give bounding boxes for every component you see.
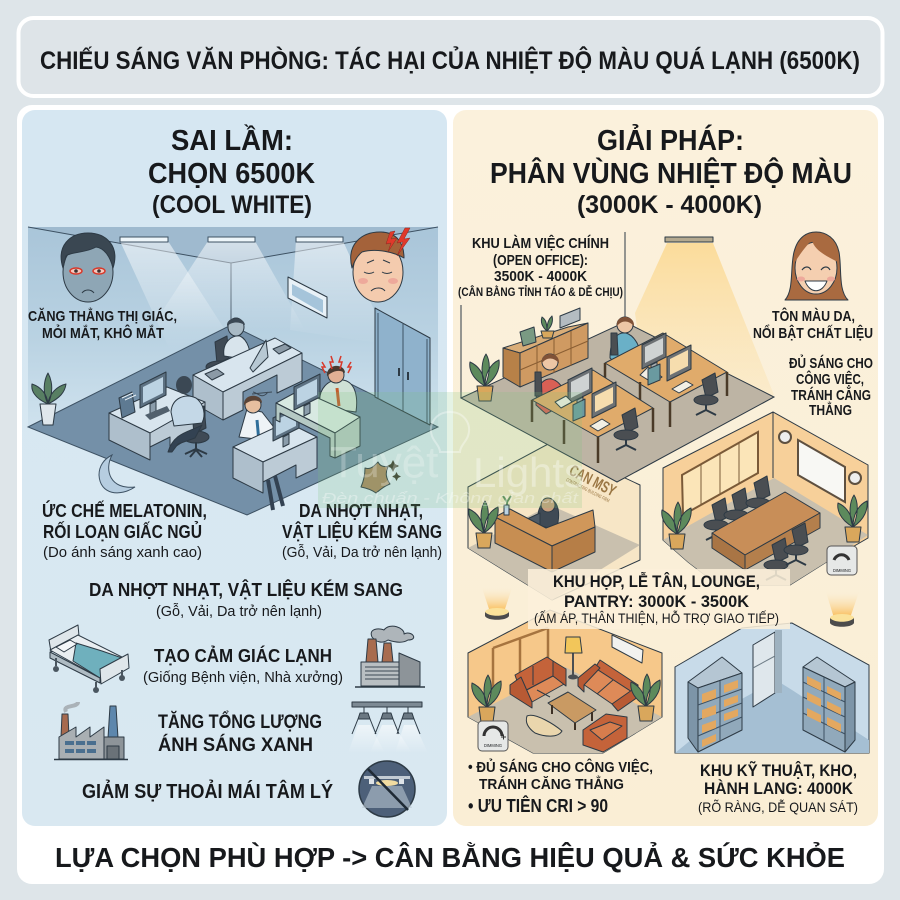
text: technical zones: (RÕ RÀNG, DỄ QUAN SÁT): [698, 799, 858, 815]
coffee table: [548, 692, 596, 730]
clocks: [779, 431, 861, 484]
text: pale skin repeated: [89, 579, 403, 620]
bookshelf right: [803, 657, 855, 752]
conference table: [712, 492, 820, 570]
doorway: [753, 630, 782, 707]
text: more blue light: ÁNH SÁNG XANH: [158, 734, 313, 756]
icon: hospital bed: [49, 625, 129, 693]
bullet list: • ƯU TIÊN CRI > 90: [468, 795, 608, 816]
icon: dimming control: [478, 721, 508, 751]
icon: ceiling spotlights: [348, 702, 428, 753]
bullet list: TRÁNH CĂNG THẲNG: [479, 775, 624, 793]
panel: solution zoning: [453, 110, 878, 826]
title box: [18, 18, 882, 96]
illustration: cold office room: [28, 227, 438, 515]
icon: crescent moon: [99, 455, 135, 493]
callout: meeting and lounge zone: PANTRY: 3000K - 3500K: [564, 592, 750, 611]
text: melatonin suppression: ỨC CHẾ MELATONIN,: [42, 500, 207, 521]
text: melatonin suppression: RỐI LOẠN GIẤC NGỦ: [43, 521, 202, 542]
callout: meeting and lounge zone: (ẤM ÁP, THÂN THIỆN, HỖ TRỢ GIAO TIẾP): [534, 609, 779, 626]
illustration: meeting room: [662, 412, 868, 585]
illustration: storage and corridor: [675, 623, 869, 753]
panel heading: solution: (3000K - 4000K): [577, 191, 762, 219]
text: technical zones: HÀNH LANG: 4000K: [704, 779, 854, 798]
watermark: Đèn chuẩn - Không gian chất: [322, 490, 579, 507]
bullet list: • ĐỦ SÁNG CHO CÔNG VIỆC,: [468, 758, 653, 776]
text: pale skin repeated: (Gỗ, Vải, Da trở nên lạnh): [156, 603, 322, 620]
text: enough light for work: TRÁNH CĂNG: [791, 387, 871, 404]
text: flatters skin: [753, 307, 873, 342]
panel heading: mistake: (COOL WHITE): [152, 191, 312, 219]
illustration: reception room: [468, 443, 640, 600]
reception sign: CAN MSY: [566, 462, 619, 500]
callout: meeting and lounge zone: [528, 569, 790, 629]
worker with headache at right desk: [276, 356, 360, 458]
icon: tired face with red eyes: [61, 233, 115, 302]
reception sign: [564, 462, 619, 505]
text: enough light for work: THẲNG: [809, 401, 852, 419]
whiteboard: [798, 440, 845, 502]
icon: warm lamp left: [482, 588, 512, 620]
sofa right: [578, 660, 638, 711]
text: more blue light: [158, 711, 322, 756]
air conditioner: [612, 635, 643, 663]
text: main workspace: KHU LÀM VIỆC CHÍNH: [472, 234, 609, 252]
text: enough light for work: [789, 354, 873, 419]
panel heading: mistake: SAI LẦM:: [171, 123, 293, 157]
floor: [28, 325, 438, 515]
illustration: open office: [461, 232, 774, 482]
text: main workspace: (OPEN OFFICE):: [493, 252, 588, 269]
text: enough light for work: ĐỦ SÁNG CHO: [789, 354, 873, 372]
icon: leather hide: [361, 460, 401, 493]
panel heading: mistake: [148, 123, 315, 219]
sofa left: [510, 657, 566, 708]
desks: [532, 333, 727, 463]
potted plant: [32, 373, 66, 425]
back workers: [535, 317, 642, 414]
door: [375, 308, 430, 425]
footer conclusion: LỰA CHỌN PHÙ HỢP -> CÂN BẰNG HIỆU QUẢ & SỨC KHỎE: [55, 841, 845, 873]
cabinet: [503, 308, 588, 387]
text: technical zones: [698, 760, 858, 815]
text: more blue light: TĂNG TỔNG LƯỢNG: [158, 711, 322, 733]
watermark: Tuyệt: [330, 438, 438, 487]
text: flatters skin: NỔI BẬT CHẤT LIỆU: [753, 324, 873, 342]
armchair: [583, 714, 627, 752]
text: melatonin suppression: (Do ánh sáng xanh cao): [43, 544, 202, 561]
text: main workspace: [458, 234, 623, 299]
watermark: [318, 392, 585, 508]
bookshelf left: [688, 657, 742, 752]
rug item: [526, 715, 562, 736]
text: enough light for work: CÔNG VIỆC,: [796, 370, 864, 388]
text: pale skin and materials: VẬT LIỆU KÉM SANG: [282, 521, 442, 542]
text: cold feeling: (Giống Bệnh viện, Nhà xưởng): [143, 669, 343, 686]
worker at left desk: [109, 372, 209, 460]
icon: crossed-out lights: [359, 761, 415, 817]
window: [682, 432, 758, 515]
text: main workspace: 3500K - 4000K: [494, 268, 587, 285]
text: cold feeling: TẠO CẢM GIÁC LẠNH: [154, 645, 332, 666]
icon: factory with chimneys: [54, 702, 128, 760]
text: main workspace: (CÂN BẰNG TỈNH TÁO & DỄ CHỊU): [458, 284, 623, 299]
icon: dimming control: DIMMING: [833, 568, 851, 573]
text: pale skin and materials: [282, 501, 442, 561]
icon: dimming control: [827, 546, 857, 575]
text: visual strain: MỎI MẮT, KHÔ MẮT: [42, 324, 164, 342]
callout: meeting and lounge zone: KHU HỌP, LỄ TÂN, LOUNGE,: [553, 572, 760, 591]
text: cold feeling: [143, 645, 343, 686]
reception sign: CONTRACTING BUILDING FIRM: [565, 477, 610, 504]
back desk and worker: [193, 318, 302, 420]
plant: [470, 354, 499, 401]
panel heading: solution: GIẢI PHÁP:: [597, 123, 744, 157]
icon: factory with smoke: [355, 626, 425, 687]
text: pale skin and materials: (Gỗ, Vải, Da trở nên lạnh): [282, 544, 442, 561]
illustration: lounge: [468, 610, 662, 753]
text: pale skin repeated: DA NHỢT NHẠT, VẬT LIỆU KÉM SANG: [89, 579, 403, 600]
panel: mistake 6500K: [22, 110, 447, 826]
text: visual strain: [28, 307, 177, 342]
panel heading: solution: PHÂN VÙNG NHIỆT ĐỘ MÀU: [490, 156, 852, 190]
text: melatonin suppression: [42, 500, 207, 561]
text: technical zones: KHU KỸ THUẬT, KHO,: [700, 760, 857, 780]
floor lamp: [565, 637, 582, 680]
worker at front desk: [233, 396, 317, 510]
text: visual strain: CĂNG THẲNG THỊ GIÁC,: [28, 307, 177, 325]
framed picture: [288, 277, 327, 318]
text: reduced comfort: GIẢM SỰ THOẢI MÁI TÂM LÝ: [82, 779, 334, 803]
window: [493, 628, 548, 690]
text: pale skin and materials: DA NHỢT NHẠT,: [299, 501, 423, 521]
bullet list: [468, 758, 653, 816]
panel heading: mistake: CHỌN 6500K: [148, 158, 315, 190]
watermark: Lights: [473, 449, 585, 496]
icon: headache face with lightning: [351, 228, 410, 302]
text: flatters skin: TÔN MÀU DA,: [772, 307, 855, 325]
icon: smiling woman: [785, 232, 848, 300]
icon: dimming control: DIMMING: [484, 743, 502, 748]
panel heading: solution: [490, 123, 852, 219]
icon: warm lamp right: [826, 592, 859, 627]
